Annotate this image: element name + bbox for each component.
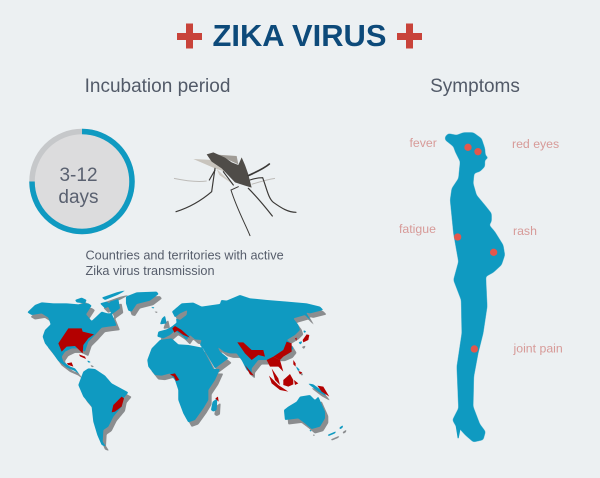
map: transmission areas [58,326,329,412]
map land [27,290,343,447]
icon: right cross [397,24,422,48]
heading: incubation period: Incubation period [85,76,230,97]
map shadow [31,294,347,451]
symptom labels: joint pain [512,342,563,356]
heading: symptoms: Symptoms [430,76,520,97]
body silhouette [445,132,505,442]
symptom labels: rash [513,224,537,238]
icon: left cross [177,24,202,48]
world map [27,290,347,451]
dial label: 3-12 [59,165,98,186]
symptom labels: red eyes [512,137,559,151]
symptom labels [399,136,563,356]
icon: mosquito [174,152,296,236]
map caption: Zika virus transmission [86,264,215,278]
symptom points [454,144,497,353]
high heel [455,422,461,438]
incubation dial [32,132,132,232]
incubation dial: days [58,187,99,208]
map caption: Countries and territories with active [86,248,284,262]
symptom labels: fatigue [399,222,436,236]
symptom labels: fever [410,136,437,150]
title [177,19,422,53]
title text: ZIKA VIRUS [212,19,386,53]
map caption [86,248,284,278]
